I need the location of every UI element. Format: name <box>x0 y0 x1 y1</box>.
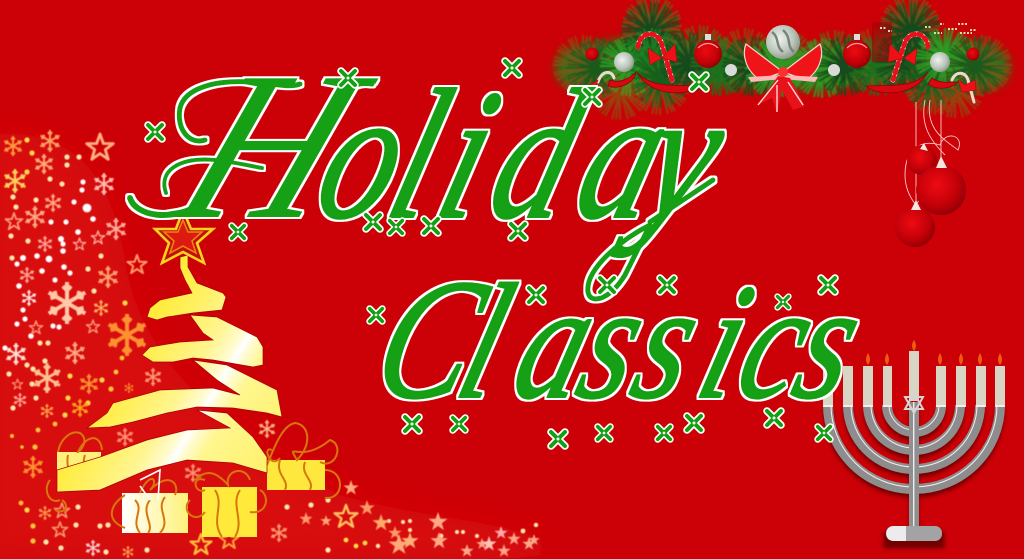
red bow <box>744 44 822 113</box>
branches <box>828 405 1000 489</box>
heading: Classics: lassics <box>441 252 881 434</box>
christmas tree <box>47 210 340 537</box>
sparkle marks <box>148 61 835 446</box>
garland specks <box>872 22 976 62</box>
tree star <box>155 210 213 263</box>
candles <box>823 351 1005 406</box>
ornament strings <box>905 100 959 205</box>
garland body <box>575 56 990 70</box>
tree ribbon <box>57 255 282 492</box>
red swags <box>608 72 958 93</box>
menorah shadow <box>828 404 1000 544</box>
red baubles <box>694 34 871 68</box>
silver ornament <box>766 25 800 59</box>
heading: Holiday: H <box>147 28 399 263</box>
menorah <box>823 340 1005 544</box>
candy canes <box>598 34 974 102</box>
flames <box>826 340 1002 366</box>
small stars <box>5 134 540 557</box>
panel: left sparkle swirl background <box>0 133 545 559</box>
snowflakes <box>4 130 287 558</box>
small bows <box>590 44 976 92</box>
heading: Classics: C <box>357 244 505 435</box>
title: Holiday Classics <box>130 28 883 435</box>
heading: Holiday: oliday <box>298 52 748 258</box>
sparkle dots <box>2 137 538 555</box>
garland needles <box>553 0 1012 120</box>
star of david <box>905 393 923 413</box>
flourishes on the script letters <box>130 82 713 299</box>
gifts <box>47 423 340 537</box>
hanging ornaments <box>895 100 966 247</box>
heading: Holiday <box>130 28 748 299</box>
garland <box>553 0 1012 120</box>
left and right small balls <box>586 48 980 76</box>
base <box>886 526 942 541</box>
stem <box>909 402 919 526</box>
